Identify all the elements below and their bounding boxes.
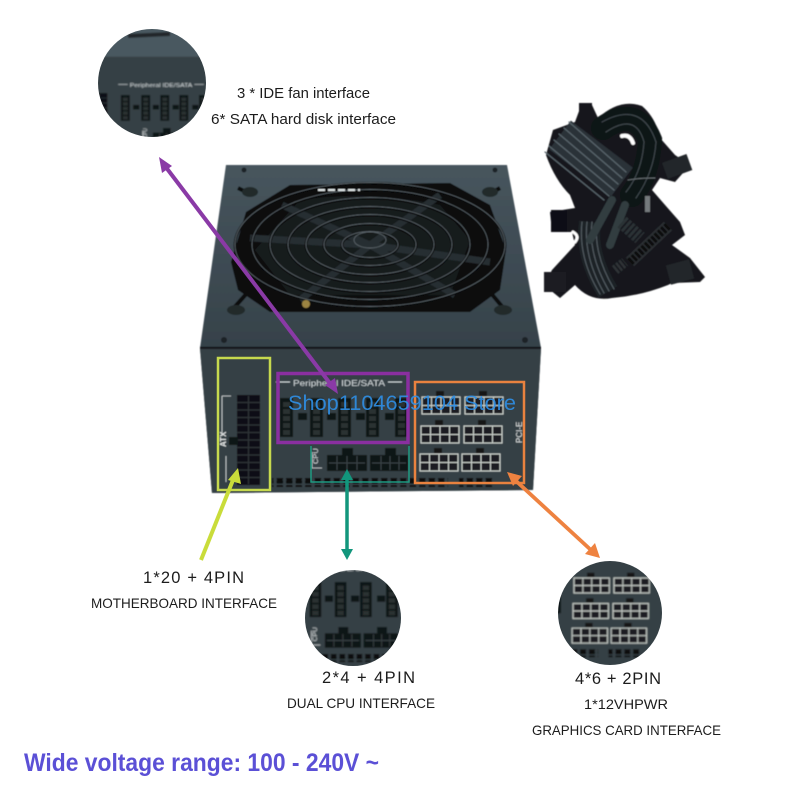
arrow: yellow-green	[201, 468, 241, 560]
caption: CPU	[287, 669, 435, 711]
caption: CPU: 2*4 + 4PIN	[322, 669, 415, 687]
caption: graphics card: 1*12VHPWR	[584, 696, 668, 712]
connector row	[630, 226, 668, 262]
arrow: orange	[507, 472, 600, 558]
caption: motherboard	[91, 569, 277, 611]
watermark: Shop1104659104 Store	[288, 392, 516, 415]
green box: CPU ports	[311, 446, 409, 482]
plugs	[662, 154, 692, 179]
yellow box: ATX port	[218, 358, 270, 490]
fan with wire guard	[231, 182, 506, 312]
front panel of case	[199, 346, 542, 494]
caption: graphics card	[532, 670, 721, 738]
caption: peripheral ports: 3 * IDE fan interface	[237, 85, 370, 102]
caption: motherboard: 1*20 + 4PIN	[143, 569, 244, 587]
gaps in bundle	[573, 190, 676, 242]
corner screws	[221, 168, 528, 343]
ATX label: ATX	[219, 431, 228, 447]
top face of case	[200, 165, 541, 348]
power supply unit	[190, 165, 550, 500]
flat ribbon: upper left	[560, 135, 622, 182]
purple box: peripheral ports	[278, 374, 408, 442]
PCI-E label: PCI-E	[515, 422, 524, 443]
caption: graphics card: GRAPHICS CARD INTERFACE	[532, 722, 721, 738]
caption: peripheral ports	[211, 85, 396, 128]
cable mass	[544, 103, 705, 299]
arrow: purple	[159, 157, 338, 394]
callout circle: peripheral ports	[98, 29, 206, 137]
flat ribbon: lower middle	[589, 222, 608, 292]
arrow: green	[341, 469, 353, 560]
callout circle: CPU ports	[305, 570, 401, 666]
caption: motherboard: MOTHERBOARD INTERFACE	[91, 595, 277, 611]
caption: graphics card: 4*6 + 2PIN	[575, 670, 661, 688]
caption: CPU: DUAL CPU INTERFACE	[287, 695, 435, 711]
flat ribbon: top arc	[603, 119, 650, 195]
bundle of modular cables	[544, 103, 705, 299]
orange box: PCIe ports	[415, 382, 524, 483]
fan mounting feet	[227, 187, 512, 315]
callout circle: PCIe ports	[558, 561, 662, 665]
caption: peripheral ports: 6* SATA hard disk interface	[211, 111, 396, 128]
voltage note: Wide voltage range: 100 - 240V ~	[24, 749, 379, 777]
